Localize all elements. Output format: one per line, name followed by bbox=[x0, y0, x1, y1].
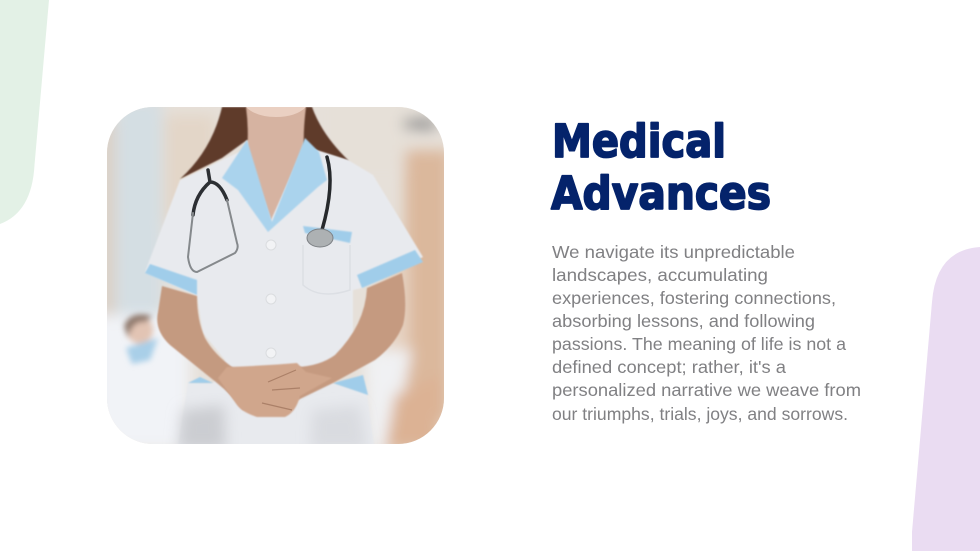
chin bbox=[246, 107, 306, 117]
stethoscope bbox=[188, 157, 330, 272]
left arm bbox=[156, 286, 243, 410]
uniform dress bbox=[145, 146, 423, 445]
body text bbox=[552, 242, 861, 424]
clasped hands bbox=[218, 363, 332, 417]
title: Medical bbox=[552, 115, 726, 168]
body text: absorbing lessons, and following bbox=[552, 311, 815, 331]
body text: We navigate its unpredictable bbox=[552, 242, 795, 262]
body text: passions. The meaning of life is not a bbox=[552, 334, 846, 354]
body text: experiences, fostering connections, bbox=[552, 288, 836, 308]
right arm bbox=[290, 273, 405, 400]
photo background: blurred hospital corridor bbox=[95, 100, 450, 450]
title: Advances bbox=[551, 167, 771, 220]
hair bbox=[180, 107, 349, 179]
buttons bbox=[266, 240, 276, 358]
body text: personalized narrative we weave from bbox=[552, 380, 861, 400]
blue collar bbox=[222, 138, 327, 232]
blurred patient in bed bbox=[124, 314, 158, 364]
photo: nurse with stethoscope bbox=[95, 100, 450, 450]
body text: landscapes, accumulating bbox=[552, 265, 768, 285]
sleeve cuffs and trims bbox=[145, 226, 423, 395]
lower skirt shading bbox=[178, 405, 368, 450]
decorative shape: green corner blob bbox=[0, 0, 49, 224]
finger lines bbox=[262, 370, 300, 410]
body text: defined concept; rather, it's a bbox=[552, 357, 786, 377]
stethoscope chest piece bbox=[307, 229, 333, 247]
decorative shape: purple corner blob bbox=[912, 247, 980, 551]
pocket seam bbox=[303, 245, 350, 294]
neck and chest skin bbox=[246, 107, 306, 220]
title bbox=[551, 115, 771, 220]
body text: our triumphs, trials, joys, and sorrows. bbox=[552, 404, 848, 424]
